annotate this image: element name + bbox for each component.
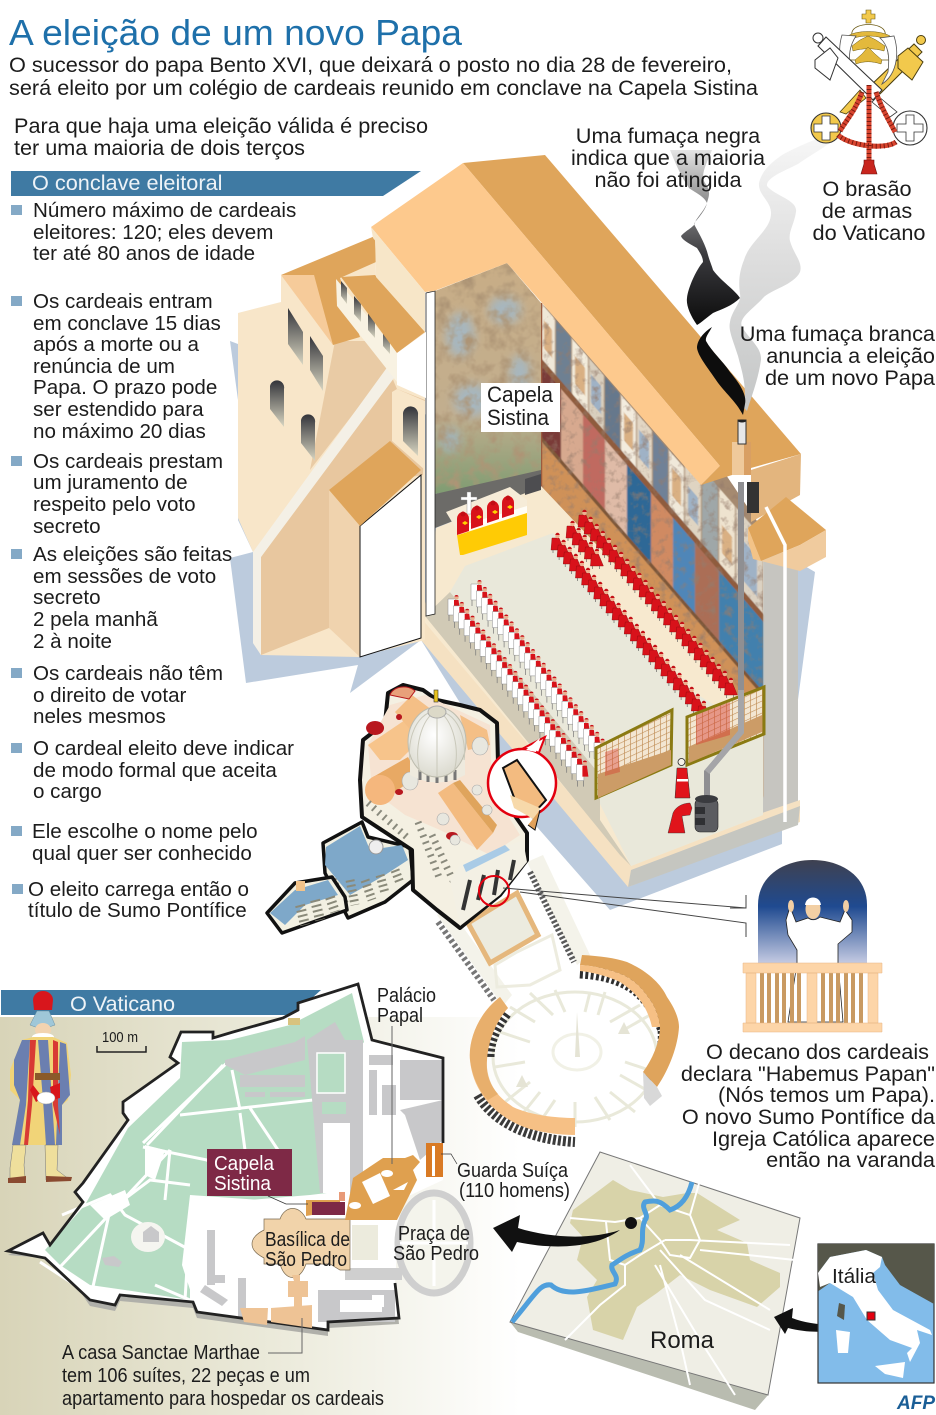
label box: Capela Sistina: Sistina bbox=[214, 1173, 272, 1195]
Vatican marker bbox=[625, 1217, 637, 1229]
land: west bbox=[818, 1273, 830, 1291]
small domes bbox=[402, 737, 492, 845]
label: Basilica bbox=[265, 1229, 350, 1271]
gallery columns right bbox=[530, 872, 574, 962]
subtitle bbox=[9, 52, 759, 100]
slab front edge bbox=[421, 618, 800, 887]
tiara bbox=[848, 10, 890, 64]
seats: white rows bbox=[448, 580, 611, 787]
right gallery bbox=[527, 855, 590, 965]
rule: maximum: eleitores: 120; eles devem bbox=[33, 221, 273, 244]
rule: timing: no máximo 20 dias bbox=[33, 420, 206, 443]
label: coat of arms: de armas bbox=[822, 198, 912, 223]
left wing bbox=[238, 236, 426, 657]
territory bbox=[8, 984, 443, 1330]
lattice screen bbox=[596, 687, 764, 798]
seats: red rows bbox=[551, 510, 737, 721]
rule: maximum bbox=[11, 199, 296, 265]
label: Basilica: São Pedro bbox=[265, 1249, 347, 1271]
white smoke bbox=[730, 130, 845, 411]
map details in the east bbox=[340, 1295, 384, 1312]
smoke label: black: Uma fumaça negra bbox=[576, 123, 761, 148]
scale bar: 100 m bbox=[102, 1029, 138, 1046]
rule: title: título de Sumo Pontífice bbox=[28, 899, 247, 922]
callout: majority: ter uma maioria de dois terços bbox=[14, 135, 305, 160]
surface bbox=[510, 1152, 800, 1395]
text: Habemus Papam: declara "Habemus Papan" bbox=[681, 1061, 935, 1086]
annex buildings bbox=[267, 822, 413, 933]
grey right face of slab bbox=[628, 806, 800, 887]
arrow: to Rome bbox=[774, 1308, 863, 1334]
St Peter's Basilica bbox=[267, 685, 556, 933]
rule: timing: Os cardeais entram bbox=[33, 290, 213, 313]
rule: self vote: Os cardeais não têm bbox=[33, 662, 223, 685]
red locator: chapel bubble bbox=[488, 737, 556, 830]
rule: acceptance: o cargo bbox=[33, 780, 102, 803]
label: Palácio Papal: Papal bbox=[377, 1005, 423, 1027]
label: Basilica: Basílica de bbox=[265, 1229, 350, 1251]
painted right wall bbox=[541, 283, 763, 796]
white pillar bbox=[426, 291, 435, 616]
rule: self vote bbox=[11, 662, 223, 728]
Basilica on map bbox=[252, 1208, 350, 1278]
Pope bbox=[786, 898, 852, 1022]
standing cardinal bbox=[675, 758, 690, 798]
section bar: Vatican: O Vaticano bbox=[70, 991, 175, 1016]
rule: timing bbox=[11, 290, 221, 443]
rule: self vote: o direito de votar bbox=[33, 684, 187, 707]
rule: oath: um juramento de bbox=[33, 471, 188, 494]
roads bbox=[40, 1060, 313, 1300]
right colonnade bbox=[580, 955, 679, 1106]
title: A eleição de um novo Papa bbox=[9, 12, 463, 53]
label: Palácio Papal: Palácio bbox=[377, 985, 436, 1007]
label: Square: Praça de bbox=[398, 1223, 470, 1245]
label: Square: São Pedro bbox=[393, 1243, 479, 1265]
urban area bbox=[570, 1180, 780, 1340]
Italy bbox=[818, 1250, 932, 1362]
rule: title: O eleito carrega então o bbox=[28, 878, 249, 901]
rule: sessions: 2 à noite bbox=[33, 630, 112, 653]
roof: left wing bbox=[281, 236, 376, 345]
label: Swiss Guard bbox=[441, 1154, 570, 1202]
rule: timing: ser estendido para bbox=[33, 398, 204, 421]
section bar: conclave bbox=[11, 170, 421, 196]
smoke label: black bbox=[571, 123, 766, 192]
medallion left bbox=[811, 113, 841, 143]
smoke label: white: Uma fumaça branca bbox=[740, 321, 936, 346]
left colonnade bbox=[470, 997, 575, 1142]
Italy inset map bbox=[818, 1244, 934, 1383]
label: Swiss Guard: (110 homens) bbox=[459, 1180, 570, 1202]
rule: sessions: 2 pela manhã bbox=[33, 608, 158, 631]
roof terrace bbox=[368, 695, 520, 855]
rule: maximum: ter até 80 anos de idade bbox=[33, 242, 255, 265]
label: Sistine Chapel: Capela bbox=[487, 382, 554, 407]
rule: sessions bbox=[11, 543, 232, 653]
Sardinia bbox=[836, 1330, 850, 1353]
rule: title bbox=[12, 878, 249, 922]
text: Habemus Papam: O novo Sumo Pontífice da bbox=[682, 1104, 936, 1129]
stove pipe bbox=[707, 482, 741, 798]
rule: timing: renúncia de um bbox=[33, 355, 175, 378]
white clearing bbox=[131, 1222, 165, 1252]
stove bbox=[695, 795, 718, 832]
label: Sistine Chapel: Sistina bbox=[487, 405, 550, 430]
coat of arms bbox=[811, 10, 927, 174]
gallery with windows bbox=[336, 275, 425, 382]
rule: acceptance: O cardeal eleito deve indicar bbox=[33, 737, 294, 760]
label: coat of arms: O brasão bbox=[822, 176, 912, 201]
grey buildings bbox=[102, 1022, 443, 1322]
label: coat of arms: do Vaticano bbox=[813, 220, 925, 245]
tassel bbox=[861, 160, 877, 174]
subtitle: será eleito por um colégio de cardeais reunido em conclave na Capela Sistina bbox=[9, 75, 759, 100]
lower side roof bbox=[748, 497, 826, 571]
side windows bbox=[368, 803, 455, 885]
label: Sistine Chapel bbox=[481, 382, 560, 432]
piazza pavement bbox=[493, 990, 657, 1127]
text: Habemus Papam: O decano dos cardeais bbox=[706, 1039, 929, 1064]
rule: maximum: Número máximo de cardeais bbox=[33, 199, 296, 222]
label: Rome: Roma bbox=[650, 1327, 715, 1354]
Sicily bbox=[875, 1362, 905, 1378]
side faces bbox=[510, 1322, 768, 1410]
rule: sessions: em sessões de voto bbox=[33, 565, 216, 588]
annex small bbox=[267, 877, 347, 933]
land: neighbours bbox=[818, 1244, 934, 1304]
Swiss Guard figure bbox=[8, 991, 72, 1183]
section bar: conclave: O conclave eleitoral bbox=[32, 170, 222, 195]
gardens bbox=[45, 993, 364, 1300]
map of Rome bbox=[510, 1152, 800, 1410]
garden plaza bbox=[90, 1145, 165, 1220]
Swiss Guard quarters bbox=[426, 1143, 443, 1177]
red locator: balcony bbox=[479, 876, 509, 906]
rule: oath: respeito pelo voto bbox=[33, 493, 196, 516]
white drain pipe bbox=[766, 507, 785, 822]
forecourt bbox=[468, 893, 560, 987]
wall outline bbox=[8, 984, 443, 1330]
callout: majority: Para que haja uma eleição válida é preciso bbox=[14, 113, 428, 138]
outer right wall bbox=[755, 560, 798, 822]
rule: sessions: secreto bbox=[33, 586, 101, 609]
St Peter's Square bbox=[437, 855, 679, 1142]
leader lines to balcony bbox=[503, 888, 746, 937]
rule: acceptance: de modo formal que aceita bbox=[33, 759, 277, 782]
Papal Palace bbox=[339, 1155, 420, 1220]
obelisk and fountains bbox=[516, 1012, 630, 1087]
label: Swiss Guard: Guarda Suíça bbox=[457, 1160, 569, 1182]
smoke label: white bbox=[740, 321, 936, 390]
smoke label: white: de um novo Papa bbox=[765, 365, 936, 390]
Sistine Chapel on map bbox=[306, 1200, 345, 1216]
smoke label: black: indica que a maioria bbox=[571, 145, 766, 170]
map background bbox=[0, 1017, 520, 1415]
balcony with Pope bbox=[743, 860, 882, 1032]
left gallery bbox=[437, 905, 512, 1006]
rule: name: Ele escolhe o nome pelo bbox=[32, 820, 258, 843]
arrow: to Vatican bbox=[493, 1215, 620, 1252]
red cord bbox=[838, 85, 896, 162]
medallion right bbox=[893, 111, 927, 145]
altar with cardinals bbox=[446, 487, 527, 555]
chimney bbox=[732, 420, 759, 513]
label: Palácio Papal bbox=[377, 985, 436, 1164]
rule: self vote: neles mesmos bbox=[33, 705, 166, 728]
gallery columns left bbox=[438, 922, 494, 1000]
label box: Capela Sistina: Capela bbox=[214, 1153, 275, 1175]
smoke label: black: não foi atingida bbox=[594, 167, 742, 192]
front gable bbox=[329, 441, 421, 657]
rules list bbox=[11, 199, 296, 922]
Marthae house bbox=[240, 1275, 312, 1328]
label: Square bbox=[393, 1223, 479, 1265]
apse red fan bbox=[390, 687, 415, 699]
rule: name bbox=[11, 820, 258, 865]
rule: oath: secreto bbox=[33, 515, 101, 538]
Rome marker bbox=[867, 1312, 875, 1320]
text: Sanctae Marthae: A casa Sanctae Marthae bbox=[62, 1342, 260, 1364]
illustration: Sistine Chapel cutaway bbox=[238, 155, 826, 887]
facade bbox=[450, 840, 527, 926]
rule: oath bbox=[11, 450, 223, 538]
great dome bbox=[408, 690, 466, 783]
keys bbox=[813, 33, 926, 117]
black smoke bbox=[670, 150, 745, 415]
label: coat of arms bbox=[813, 176, 925, 245]
orange roofs bbox=[365, 695, 497, 850]
railing bbox=[743, 963, 882, 1032]
rule: sessions: As eleições são feitas bbox=[33, 543, 232, 566]
label: Italy: Itália bbox=[832, 1265, 877, 1288]
rule: timing: em conclave 15 dias bbox=[33, 312, 221, 335]
basilica silhouette bbox=[360, 685, 527, 928]
subtitle: O sucessor do papa Bento XVI, que deixará o posto no dia 28 de fevereiro, bbox=[9, 52, 732, 77]
rule: oath: Os cardeais prestam bbox=[33, 450, 223, 473]
St Peter's Square on map bbox=[345, 1193, 470, 1293]
rule: timing: após a morte ou a bbox=[33, 333, 200, 356]
text: Sanctae Marthae: tem 106 suítes, 22 peças e um bbox=[62, 1365, 310, 1387]
main roof bbox=[371, 155, 801, 522]
gate bbox=[288, 1018, 300, 1025]
text: Habemus Papam bbox=[681, 1039, 936, 1172]
text: Sanctae Marthae: apartamento para hospedar os cardeais bbox=[62, 1388, 384, 1410]
text: Habemus Papam: então na varanda bbox=[766, 1147, 936, 1172]
floor bbox=[421, 486, 763, 866]
callout: majority bbox=[14, 113, 428, 160]
rule: timing: Papa. O prazo pode bbox=[33, 376, 217, 399]
fresco: Last Judgement wall bbox=[435, 263, 541, 528]
roads bbox=[565, 1165, 795, 1395]
river Tiber bbox=[512, 1182, 692, 1322]
Vatican map bbox=[8, 984, 570, 1410]
text: Habemus Papam: Igreja Católica aparece bbox=[712, 1126, 935, 1151]
scale bar bbox=[97, 1029, 146, 1052]
white south area bbox=[182, 1195, 260, 1310]
label box: Capela Sistina bbox=[207, 1149, 308, 1204]
section bar: Vatican bbox=[1, 990, 321, 1016]
stooping cardinal at stove bbox=[668, 803, 692, 833]
Belvedere courtyards bbox=[317, 1053, 350, 1193]
shadow under chapel bbox=[230, 341, 815, 910]
smoke label: white: anuncia a eleição bbox=[766, 343, 935, 368]
rule: acceptance bbox=[11, 737, 294, 803]
red cupolas bbox=[366, 714, 458, 840]
text: Sanctae Marthae bbox=[62, 1318, 384, 1410]
text: Habemus Papam: (Nós temos um Papa). bbox=[718, 1082, 935, 1107]
AFP logo: AFP bbox=[896, 1393, 935, 1414]
annex large bbox=[323, 822, 413, 918]
rule: name: qual quer ser conhecido bbox=[32, 842, 252, 865]
Corsica bbox=[837, 1303, 845, 1320]
windows bbox=[270, 308, 418, 461]
wall shadow bbox=[8, 1237, 399, 1336]
